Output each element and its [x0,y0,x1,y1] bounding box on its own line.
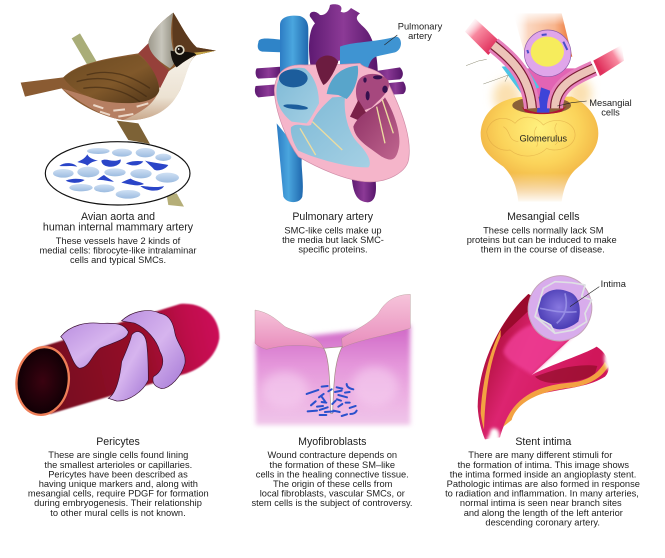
text: pulmonary artery description: the media but lack SMC- [282,235,384,245]
text: pericytes description [28,450,209,518]
diagram: medial cells ellipse [45,142,190,205]
text: pulmonary artery description: SMC-like cells make up [284,226,382,236]
label: pulmonary artery [398,21,443,41]
text: stent intima description: There are many different stimuli for [468,450,612,460]
illustration: healing wound [255,294,410,425]
label line [557,101,587,106]
label: mesangial cells: Mesangial [589,98,632,108]
text: pericytes description: having unique markers and, along with [39,479,198,489]
label line [384,35,397,45]
text: stent intima description: normal intima is seen near branch sites [460,498,622,508]
label: mesangial cells: cells [601,107,620,117]
text: pericytes description: Pericytes have been described as [48,469,188,479]
text: avian aorta description: These vessels have 2 kinds of [56,236,181,246]
text: pericytes description: during embryogenesis. Their relationship [34,498,202,508]
illustration: heart [255,4,409,202]
panel: myofibroblasts [251,294,413,508]
label line [570,287,599,307]
label: intima: Intima [601,279,627,289]
text: avian aorta description: medial cells: fibrocyte-like intralaminar [39,245,197,255]
heading: mesangial cells: Mesangial cells [507,211,580,223]
text: myofibroblasts description: cells in the healing connective tissue. [256,469,409,479]
label: pulmonary artery: artery [408,31,432,41]
illustration: bird on a branch [21,13,216,207]
text: stent intima description: the intima formed inside an angioplasty stent. [450,469,636,479]
panel: stent intima [445,267,640,527]
text: myofibroblasts description: local fibroblasts, vascular SMCs, or [260,489,405,499]
text: stent intima description: descending coronary artery. [485,517,600,527]
text: stent intima description: the formation of intima. This image shows [458,460,629,470]
text: mesangial cells description: them in the course of disease. [481,245,605,255]
text: stent intima description: and along the length of the left anterior [464,508,623,518]
text: avian aorta description [39,236,197,265]
heading: pericytes: Pericytes [96,436,140,448]
text: mesangial cells description: proteins but can be induced to make [467,235,617,245]
heading: avian aorta: human internal mammary artery [43,222,194,234]
text: avian aorta description: cells and typical SMCs. [70,255,166,265]
text: myofibroblasts description: The origin of these cells from [273,479,393,489]
text: pericytes description: These are single cells found lining [48,450,188,460]
illustration: stented artery [478,267,619,443]
text: myofibroblasts description: Wound contracture depends on [268,450,397,460]
heading: myofibroblasts: Myofibroblasts [298,436,366,448]
heading: avian aorta: Avian aorta and [81,211,155,223]
text: pulmonary artery description [282,226,384,255]
text: pericytes description: mesangial cells, require PDGF for formation [28,489,209,499]
text: mesangial cells description: These cells normally lack SM [483,225,603,235]
heading: pulmonary artery: Pulmonary artery [292,211,374,223]
label: mesangial cells [589,98,632,117]
text: myofibroblasts description: stem cells is the subject of controversy. [251,498,413,508]
text: stent intima description: Pathologic intimas are also formed in response [447,479,640,489]
label: pulmonary artery: Pulmonary [398,21,443,31]
panel: avian aorta [21,13,216,265]
text: myofibroblasts description [251,450,413,508]
text: pericytes description: to other mural cells is not known. [50,508,186,518]
text: stent intima description [445,450,640,527]
heading: stent intima: Stent intima [515,436,571,448]
illustration: capillary with pericytes [12,304,219,418]
text: mesangial cells description [467,225,617,255]
panel: pericytes [12,304,219,518]
label: glomerulus: Glomerulus [520,134,567,144]
text: pericytes description: the smallest arterioles or capillaries. [44,460,192,470]
illustration: glomerulus [465,10,624,203]
text: pulmonary artery description: specific proteins. [298,245,368,255]
panel: mesangial cells [465,10,632,255]
text: myofibroblasts description: the formation of these SM–like [270,460,395,470]
panel: pulmonary artery [255,4,443,255]
heading: avian aorta [43,211,194,234]
text: stent intima description: to radiation and inflammation. In many arteries, [445,489,639,499]
